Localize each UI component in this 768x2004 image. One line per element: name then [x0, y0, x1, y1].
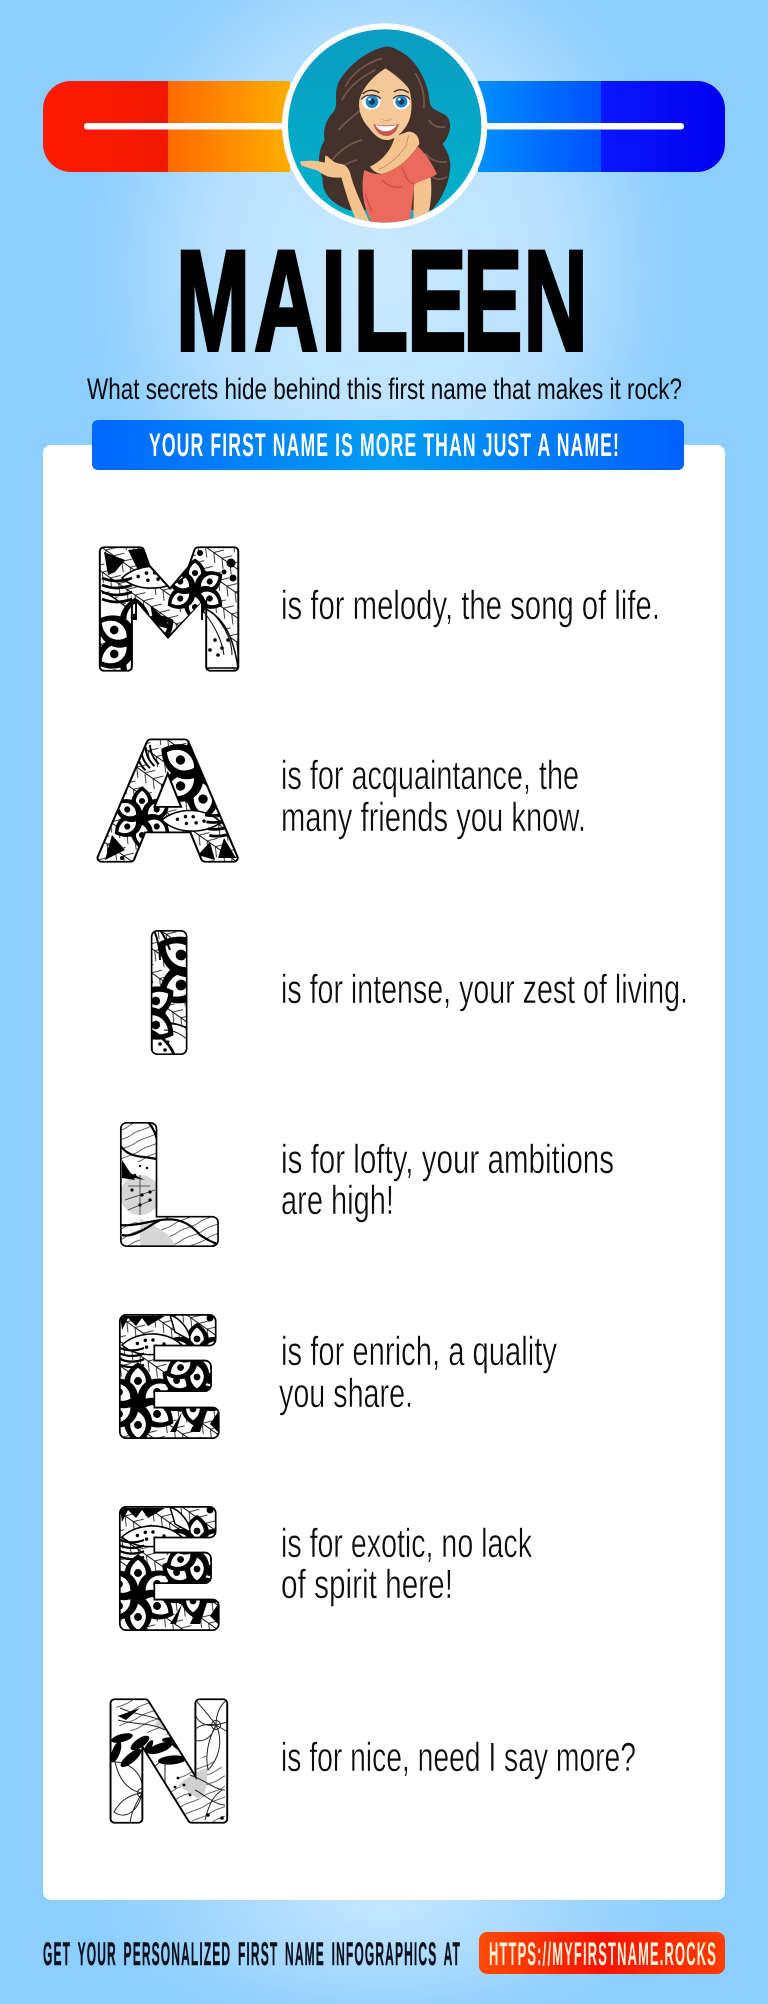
text L: are high!: [281, 1177, 394, 1223]
face: [359, 68, 412, 140]
text E: is for enrich, a quality: [281, 1328, 557, 1374]
text A: many friends you know.: [281, 794, 586, 840]
text E second: is for exotic, no lack: [281, 1520, 532, 1566]
row I: [150, 930, 686, 1055]
neck: [370, 132, 419, 174]
doodle letter I: I: [146, 901, 192, 1083]
header colour bar: [43, 81, 725, 172]
arm and hand: [300, 155, 369, 223]
row M: [98, 546, 658, 672]
doodle letter N: [110, 1698, 228, 1824]
text A: is for acquaintance, the: [281, 752, 579, 798]
doodle letter M: M: [92, 514, 247, 703]
doodle letter A: A: [97, 707, 239, 894]
doodle letter M: [98, 546, 240, 672]
doodle letter E: E: [116, 1287, 219, 1466]
text A: [281, 752, 586, 840]
portrait: cartoon woman in circle: [282, 23, 487, 229]
text E: you share.: [279, 1370, 413, 1416]
doodle letter L: [120, 1122, 219, 1247]
doodle letter E: E: [116, 1479, 219, 1658]
doodle letter N: N: [102, 1667, 236, 1855]
doodle letter L: L: [116, 1093, 217, 1275]
text L: [281, 1136, 614, 1223]
row E second: [118, 1506, 532, 1631]
doodle letter E: [118, 1314, 220, 1439]
nose: [381, 119, 391, 121]
text L: is for lofty, your ambitions: [281, 1136, 614, 1182]
right eye: [393, 94, 410, 109]
text E: [279, 1328, 557, 1416]
left eye: [362, 94, 381, 110]
title: MAILEEN: [176, 221, 588, 381]
doodle letter A: [96, 738, 239, 863]
ribbon: [92, 420, 684, 470]
doodle letter E: [118, 1506, 220, 1631]
arm right: [413, 177, 431, 223]
white content panel: [43, 445, 725, 1900]
hair: [319, 47, 450, 210]
text E second: [281, 1520, 532, 1607]
text E second: of spirit here!: [281, 1561, 453, 1607]
row L: [120, 1122, 613, 1247]
row A: [96, 738, 584, 863]
doodle letter I: [150, 930, 188, 1055]
shirt: [363, 147, 437, 223]
row E: [118, 1314, 557, 1439]
brows and lashes: [361, 90, 410, 99]
mouth: [373, 124, 399, 136]
row N: [110, 1698, 635, 1824]
